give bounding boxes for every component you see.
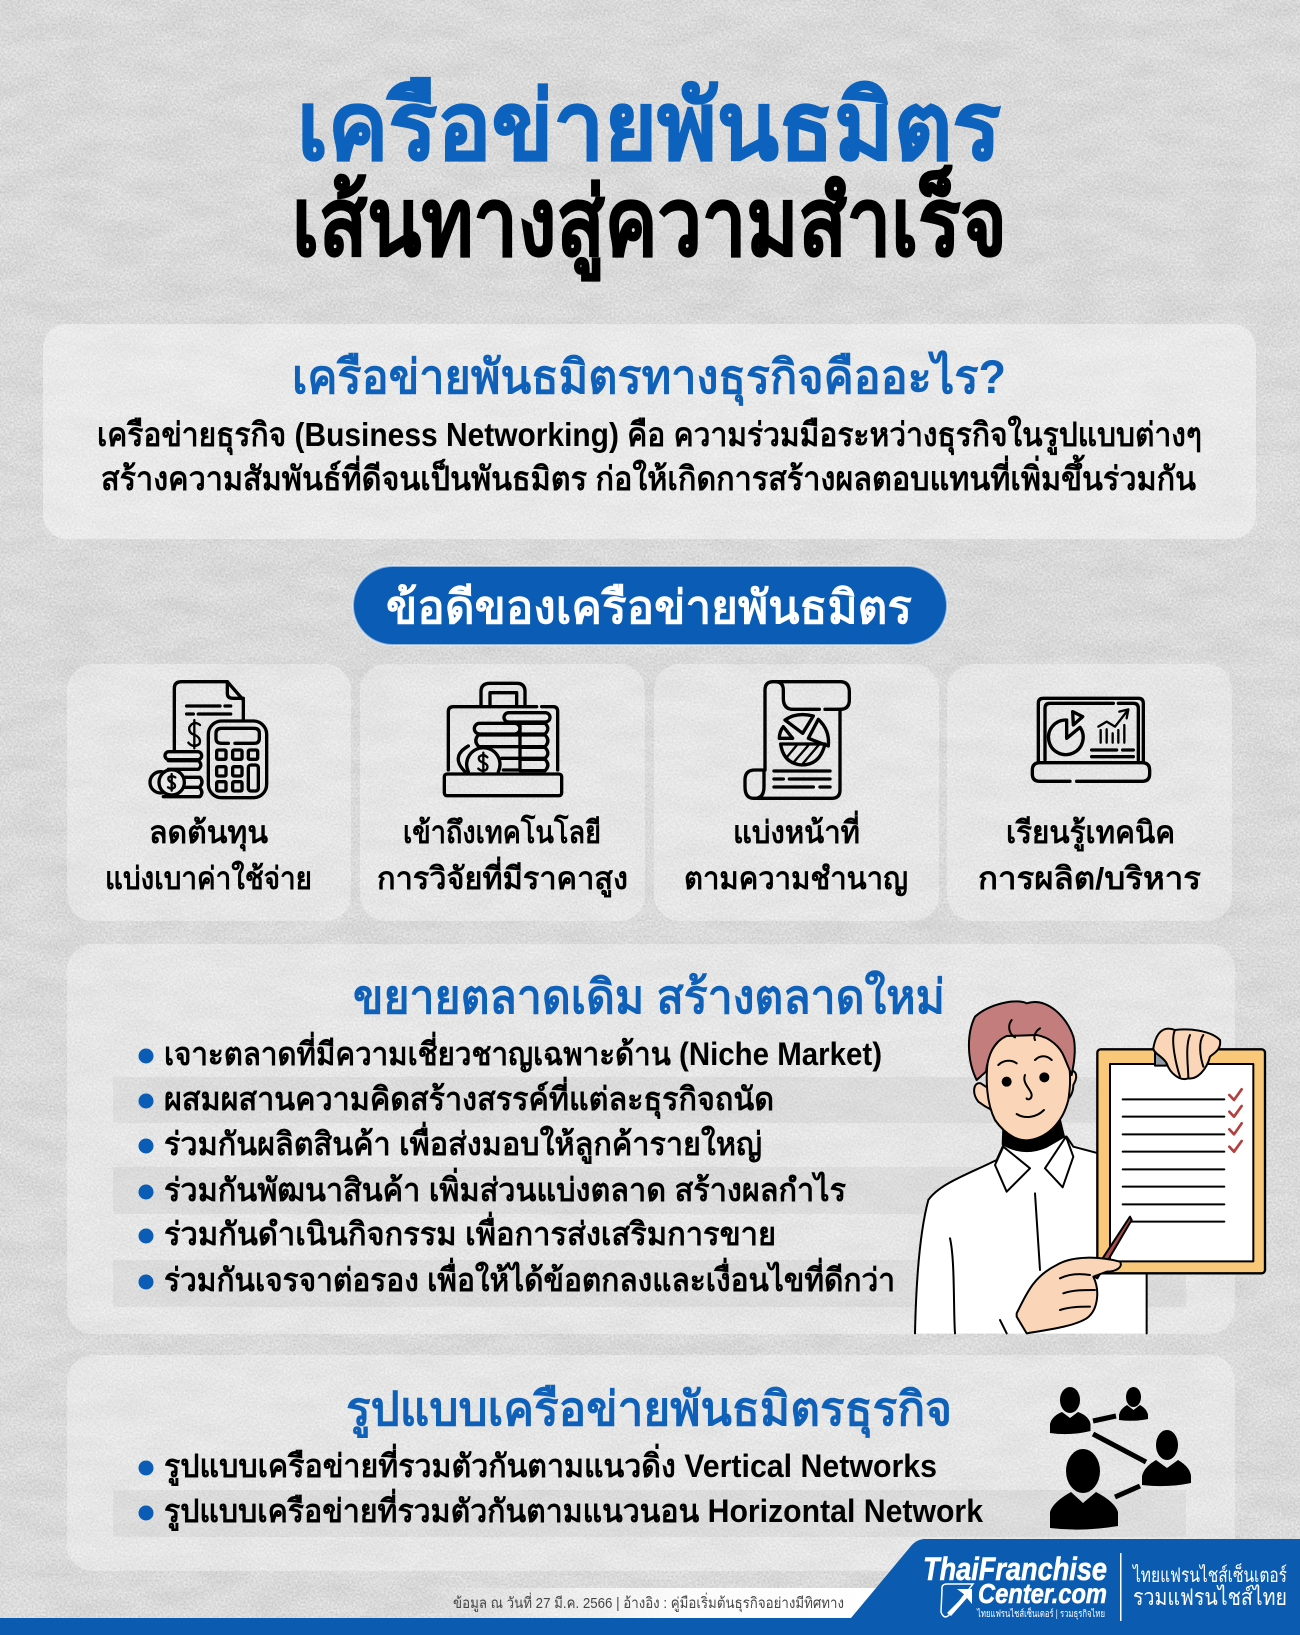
bullet list: ร่วมกันผลิตสินค้า เพื่อส่งมอบให้ลูกค้ารายใหญ่ (164, 1121, 762, 1165)
logo: ThaiFranchise Center.com: ไทยแฟรนไชส์เซ็นเตอร์ | รวมธุรกิจไทย (976, 1606, 1105, 1620)
icon: people network (1050, 1387, 1191, 1530)
logo: ThaiFranchise Center.com: Center.com (978, 1578, 1107, 1609)
panel: network types (67, 1355, 1235, 1571)
bullet list: ร่วมกันเจรจาต่อรอง เพื่อให้ได้ข้อตกลงและเงื่อนไขที่ดีกว่า (164, 1257, 895, 1298)
bullet list: เจาะตลาดที่มีความเชี่ยวชาญเฉพาะด้าน (Niche Market) (164, 1031, 882, 1073)
panel: what is a business network (43, 324, 1256, 539)
panel body text (97, 415, 1202, 497)
section pill: advantages (353, 566, 947, 645)
card text: แบ่งเบาค่าใช้จ่าย (105, 860, 312, 896)
card text (377, 814, 628, 898)
icon: laptop with charts (1032, 698, 1150, 781)
card: learn techniques (947, 664, 1232, 921)
card text: การผลิต/บริหาร (978, 861, 1201, 896)
card text (105, 815, 312, 896)
icon: report scroll with pie chart (745, 682, 849, 798)
card text (684, 810, 908, 897)
icon: calculator, document and coins (150, 682, 267, 798)
title (292, 74, 1007, 282)
card: access to technology (360, 664, 645, 921)
logo: ThaiFranchise Center.com (923, 1551, 1107, 1620)
bullet list: ผสมผสานความคิดสร้างสรรค์ที่แต่ละธุรกิจถนัด (164, 1076, 774, 1120)
bullet list (138, 1443, 983, 1532)
illustration: man pointing at clipboard (915, 1001, 1265, 1333)
card text: เรียนรู้เทคนิค (1006, 815, 1175, 852)
bullet list: รูปแบบเครือข่ายที่รวมตัวกันตามแนวดิ่ง Vertical Networks (164, 1443, 937, 1487)
logo arrow (941, 1584, 973, 1617)
card text: ลดต้นทุน (149, 815, 268, 852)
footer bar and logo (0, 1539, 1300, 1635)
logo: ThaiFranchise Center.com: ThaiFranchise (923, 1551, 1107, 1587)
bullet list: ร่วมกันพัฒนาสินค้า เพิ่มส่วนแบ่งตลาด สร้างผลกำไร (164, 1167, 846, 1208)
panel heading: รูปแบบเครือข่ายพันธมิตรธุรกิจ (346, 1382, 952, 1439)
panel body text: สร้างความสัมพันธ์ที่ดีจนเป็นพันธมิตร ก่อให้เกิดการสร้างผลตอบแทนที่เพิ่มขึ้นร่วมกัน (101, 454, 1196, 497)
source note strip (430, 1588, 878, 1618)
card text: ตามความชำนาญ (684, 861, 908, 897)
icon: briefcase with coins (444, 683, 562, 796)
tagline (1131, 1562, 1287, 1610)
source note strip: ข้อมูล ณ วันที่ 27 มี.ค. 2566 | อ้างอิง : คู่มือเริ่มต้นธุรกิจอย่างมีทิศทาง (453, 1592, 844, 1613)
card text: แบ่งหน้าที่ (733, 810, 860, 850)
card: divide duties (654, 664, 939, 921)
panel: expand markets (67, 944, 1265, 1334)
section pill: advantages: ข้อดีของเครือข่ายพันธมิตร (386, 581, 912, 633)
bullet list (138, 1031, 895, 1298)
title line 2: เส้นทางสู่ความสำเร็จ (292, 165, 1007, 282)
panel heading: ขยายตลาดเดิม สร้างตลาดใหม่ (353, 969, 945, 1023)
card text: เข้าถึงเทคโนโลยี (403, 814, 601, 850)
bullet list: รูปแบบเครือข่ายที่รวมตัวกันตามแนวนอน Horizontal Network (164, 1488, 983, 1532)
panel heading: เครือข่ายพันธมิตรทางธุรกิจคืออะไร? (292, 349, 1006, 406)
bullet list: ร่วมกันดำเนินกิจกรรม เพื่อการส่งเสริมการขาย (164, 1211, 776, 1252)
panel body text: เครือข่ายธุรกิจ (Business Networking) คือ ความร่วมมือระหว่างธุรกิจในรูปแบบต่างๆ (97, 415, 1202, 456)
card: reduce cost (67, 664, 351, 921)
card text: การวิจัยที่มีราคาสูง (377, 856, 628, 898)
card text (978, 815, 1201, 896)
title line 1: เครือข่ายพันธมิตร (297, 74, 1001, 180)
